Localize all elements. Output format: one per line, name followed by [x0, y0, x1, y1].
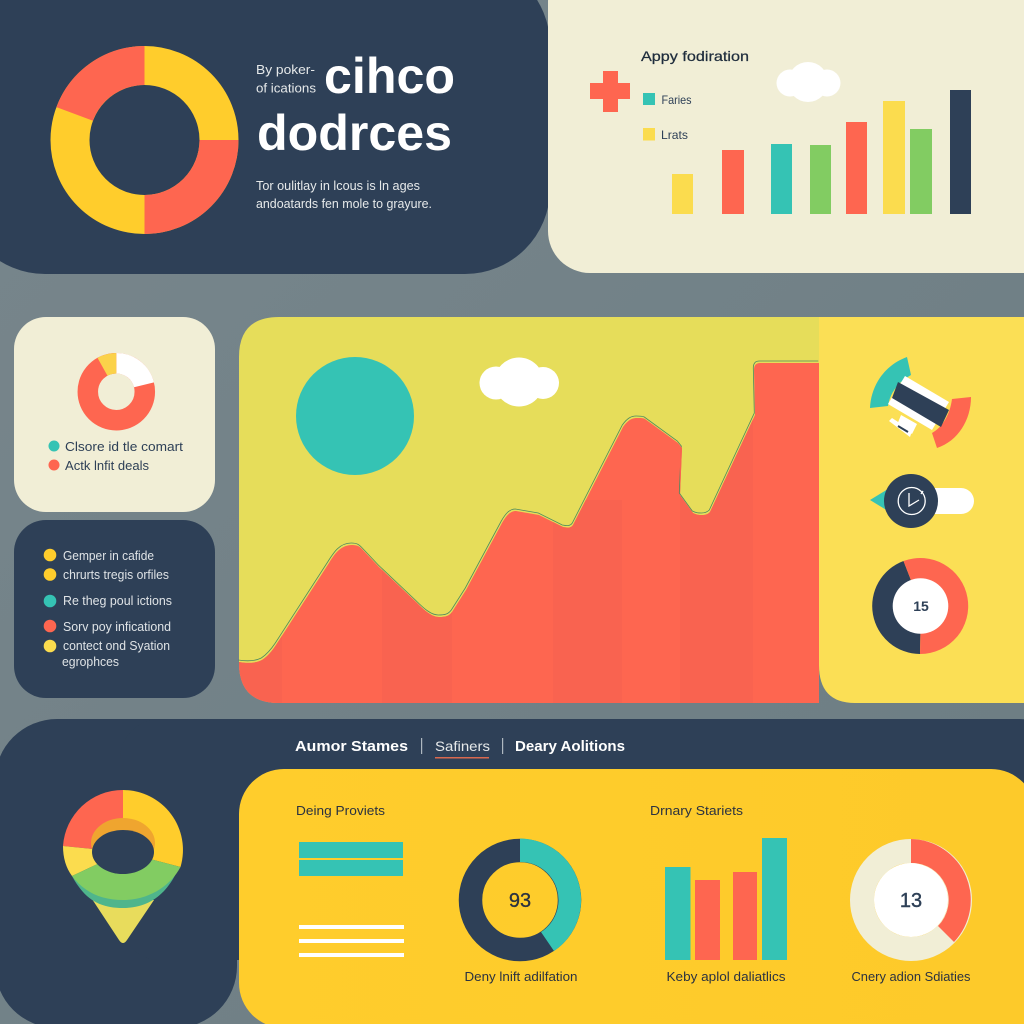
panel: dark list [14, 520, 215, 698]
title: cihco [324, 48, 455, 104]
bar chart [665, 838, 787, 984]
chart: small donut [88, 363, 145, 420]
bar chart [672, 90, 971, 214]
intro text [256, 62, 316, 96]
intro text: of ications [256, 80, 316, 96]
panel: top bar chart [548, 0, 1024, 273]
panel: bottom yellow [239, 769, 1024, 1024]
chart: main donut [70, 65, 219, 214]
list items: Gemper in cafide [63, 549, 154, 563]
list items: Re theg poul ictions [63, 594, 172, 608]
caption: Keby aplol daliatlics [666, 970, 786, 984]
legend: Clsore id tle comart [65, 440, 184, 454]
legend [48, 440, 184, 473]
icon: cloud [480, 358, 559, 406]
panel: bottom dark [0, 719, 1024, 1024]
chart: donut 93 [464, 838, 581, 984]
chart: donut 13: 13 [900, 890, 922, 912]
heading: Appy fodiration [641, 48, 749, 64]
description: Tor oulitlay in lcous is ln ages [256, 178, 420, 193]
panel: area chart [238, 317, 819, 710]
list items: chrurts tregis orfiles [63, 568, 169, 582]
title: dodrces [257, 105, 452, 161]
intro text: By poker- [256, 62, 315, 77]
heading: right: Drnary Stariets [650, 803, 744, 818]
icon: rocket [870, 357, 971, 448]
legend [643, 93, 692, 142]
area chart [238, 361, 819, 710]
panel: header [0, 0, 550, 274]
list items: egrophces [62, 655, 119, 669]
heading: left: Deing Proviets [296, 803, 386, 818]
caption: Deny lnift adilfation [464, 970, 578, 984]
title [257, 48, 455, 161]
panel: right icons background [819, 317, 1024, 703]
description [256, 178, 432, 211]
legend: Faries [662, 93, 692, 107]
chart: donut with number: 15 [913, 598, 929, 614]
list items: contect ond Syation [63, 639, 170, 653]
icon: sun circle [296, 357, 414, 475]
chart: donut 13 [852, 839, 971, 984]
list items: Sorv poy inficationd [63, 620, 171, 634]
panel: right icons [870, 357, 974, 654]
tabs: Deary Aolitions [515, 738, 625, 755]
tabs: Safiners [435, 738, 490, 754]
tabs: Aumor Stames [295, 738, 408, 755]
tabs [295, 738, 625, 758]
icon: cloud [776, 62, 840, 102]
legend: Lrats [661, 128, 688, 142]
panel: small donut [14, 317, 215, 512]
legend: Actk lnfit deals [65, 459, 149, 473]
description: andoatards fen mole to grayure. [256, 196, 432, 211]
icon: cross [590, 71, 630, 112]
caption: Cnery adion Sdiaties [852, 970, 970, 984]
chart: donut with number [872, 558, 968, 654]
list items [44, 549, 172, 669]
chart: donut 93: 93 [509, 890, 531, 912]
icon: clock toggle [870, 474, 974, 528]
icon: stripes [299, 842, 404, 957]
icon: map pin [63, 790, 183, 943]
